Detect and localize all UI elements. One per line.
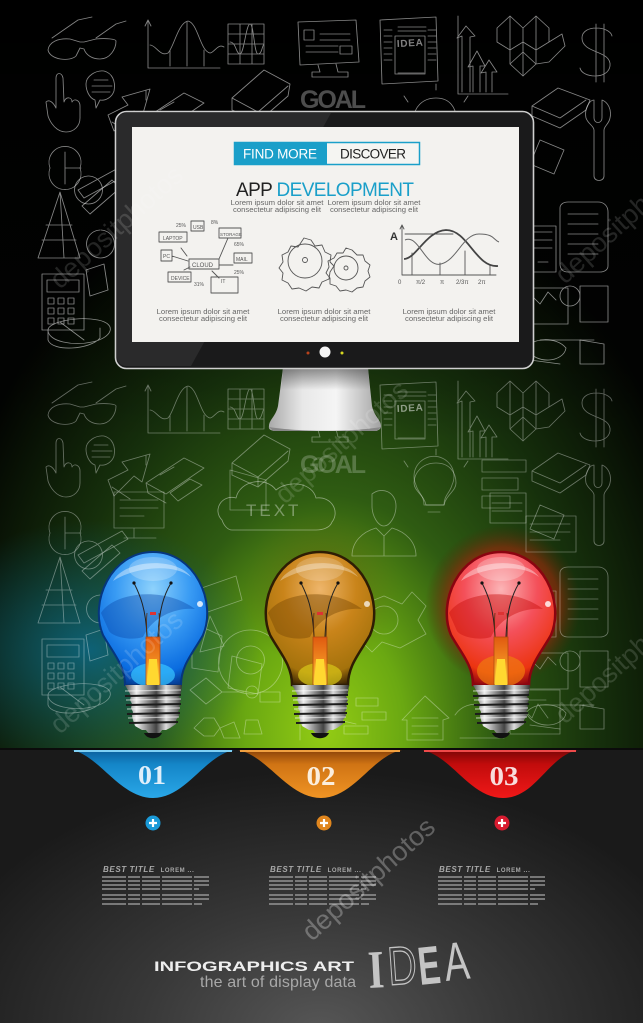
doodle: idea label lower: IDEA bbox=[397, 403, 423, 415]
text block 3 bbox=[438, 865, 545, 904]
sketch: curve chart: 2π bbox=[478, 280, 485, 286]
tab 03 bbox=[422, 750, 578, 798]
sketch: cloud network: 8% bbox=[211, 220, 219, 226]
sketch: cloud network: STORAGE bbox=[220, 232, 242, 237]
tab buttons: DISCOVER bbox=[340, 146, 406, 162]
idea hand lettering: E bbox=[415, 935, 443, 997]
sketch: cloud network: 65% bbox=[234, 242, 245, 248]
idea hand lettering: A bbox=[441, 931, 472, 993]
bulb: blue bbox=[99, 552, 207, 738]
power button and indicator lights bbox=[306, 346, 344, 358]
doodle layer upper bbox=[38, 16, 612, 364]
caption: right: Lorem ipsum dolor sit amet bbox=[403, 307, 495, 316]
sketch: curve chart: π bbox=[440, 280, 444, 286]
watermark 3: depositphotos bbox=[44, 605, 189, 739]
heading caption left: consectetur adipiscing elit bbox=[233, 205, 322, 214]
text block 3 heading: BEST TITLE LOREM ... bbox=[439, 865, 530, 874]
tab buttons bbox=[234, 142, 420, 165]
heading caption left: Lorem ipsum dolor sit amet bbox=[231, 198, 323, 207]
watermark 2: depositphotos bbox=[269, 375, 414, 509]
caption: left: Lorem ipsum dolor sit amet bbox=[157, 307, 249, 316]
text block 2 heading: BEST TITLE LOREM ... bbox=[270, 865, 361, 874]
panel top edge bbox=[0, 748, 643, 750]
chalkboard background bbox=[0, 0, 643, 750]
sketch: curve chart: π/2 bbox=[416, 280, 426, 286]
tab 02 bbox=[238, 750, 402, 798]
text block 2 bbox=[269, 865, 376, 904]
idea hand lettering bbox=[366, 931, 472, 1000]
screen heading: APP DEVELOPMENT bbox=[236, 180, 414, 201]
sketch: cloud network: MAIL bbox=[236, 257, 248, 263]
sketch: cloud network: CLOUD bbox=[192, 263, 214, 269]
text block 1 heading: BEST TITLE LOREM ... bbox=[103, 865, 194, 874]
bottom dark panel bbox=[0, 749, 643, 1023]
watermark 4: depositphotos bbox=[296, 812, 441, 946]
sketch: cloud network: DEVICE bbox=[171, 276, 190, 282]
monitor bezel bbox=[116, 112, 534, 368]
top darkening bbox=[0, 0, 643, 440]
monitor bbox=[116, 112, 534, 368]
doodle: text cloud bbox=[218, 482, 335, 530]
doodle: goal label lower: GOAL bbox=[300, 451, 366, 479]
sketch: cloud network: LAPTOP bbox=[163, 236, 183, 242]
sketch: curve chart bbox=[390, 225, 499, 286]
plus icon blue bbox=[146, 816, 160, 830]
caption: right: consectetur adipiscing elit bbox=[405, 314, 494, 323]
tab 01 bbox=[72, 750, 234, 798]
sketch: cloud network: 31% bbox=[194, 282, 205, 288]
idea hand lettering: I bbox=[366, 939, 386, 1000]
bezel gloss bbox=[117, 113, 331, 366]
heading caption right: Lorem ipsum dolor sit amet bbox=[328, 198, 420, 207]
tab 01: 01 bbox=[138, 760, 166, 790]
heading caption right: consectetur adipiscing elit bbox=[330, 205, 419, 214]
red glow bbox=[425, 525, 581, 685]
doodle: goal label: GOAL bbox=[300, 86, 366, 114]
sketch: curve chart: A bbox=[390, 231, 398, 243]
footer subtitle: the art of display data bbox=[200, 974, 356, 991]
sketch: cloud network: USB bbox=[193, 225, 204, 231]
footer title: INFOGRAPHICS ART bbox=[154, 958, 355, 974]
tab 03: 03 bbox=[490, 761, 518, 791]
doodle: text cloud: TEXT bbox=[246, 501, 301, 520]
orange glow bbox=[242, 510, 402, 670]
monitor stand bbox=[269, 368, 381, 431]
sketch: cloud network: PC bbox=[163, 254, 170, 260]
sketch: cloud network bbox=[159, 220, 252, 293]
caption: left: consectetur adipiscing elit bbox=[159, 314, 248, 323]
sketch: curve chart: 0 bbox=[398, 280, 402, 286]
tab 02: 02 bbox=[306, 761, 336, 791]
bulb: orange bbox=[266, 552, 374, 738]
blue glow bbox=[0, 520, 260, 780]
watermark 1: depositphotos bbox=[44, 160, 189, 294]
sketch: curve chart: 2/3π bbox=[456, 280, 468, 286]
bulb: red bbox=[447, 552, 555, 738]
idea hand lettering: D bbox=[386, 935, 419, 997]
caption: center: Lorem ipsum dolor sit amet bbox=[278, 307, 370, 316]
doodle: center lower sketches bbox=[114, 456, 576, 740]
doodle: person bbox=[352, 490, 416, 556]
sketch: cloud network: IT bbox=[221, 279, 225, 285]
screen bbox=[132, 127, 519, 342]
caption: center: consectetur adipiscing elit bbox=[280, 314, 369, 323]
sketch: gears bbox=[279, 238, 370, 292]
tab buttons: FIND MORE bbox=[243, 146, 317, 162]
plus icon red bbox=[494, 816, 510, 830]
sketch: cloud network: 25% bbox=[176, 223, 187, 229]
plus icon orange bbox=[316, 816, 332, 830]
sketch: cloud network: 25% bbox=[234, 270, 245, 276]
doodle layer lower bbox=[38, 381, 612, 729]
text block 1 bbox=[102, 865, 209, 904]
doodle: idea label upper: IDEA bbox=[397, 38, 423, 50]
